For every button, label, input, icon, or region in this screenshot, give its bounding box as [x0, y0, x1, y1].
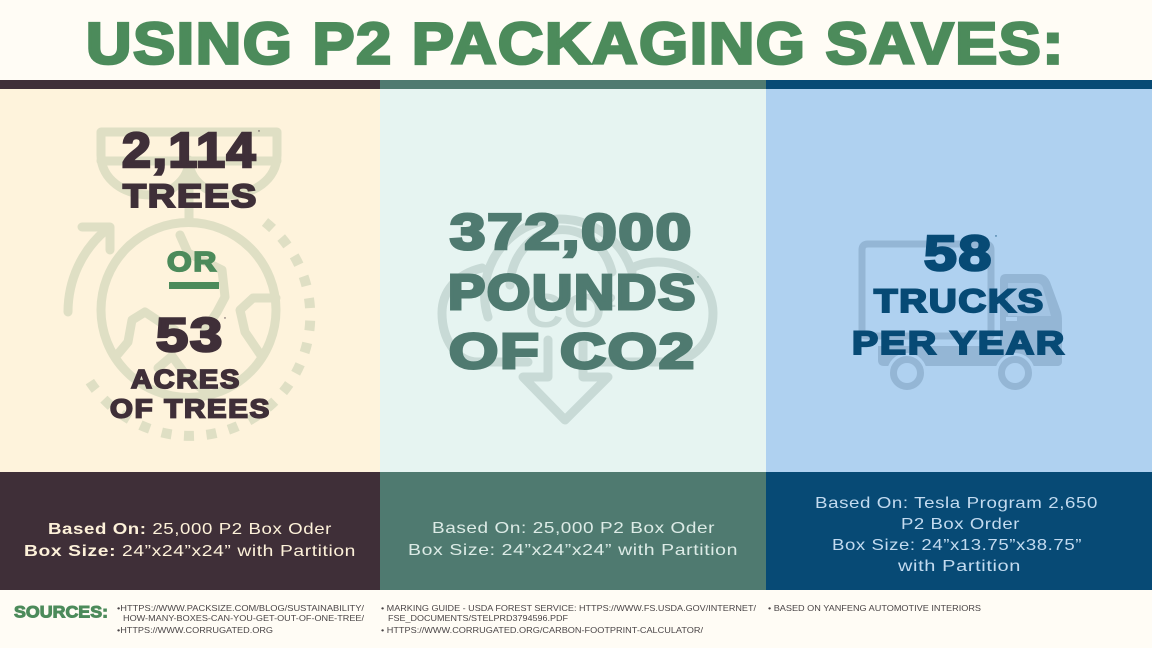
- source list: column 1: [117, 603, 365, 635]
- stat: 53 acres: 53: [156, 308, 224, 361]
- stat: 58 trucks per year: *: [995, 235, 997, 241]
- stat: 372,000 pounds of CO2: 372,000: [450, 204, 693, 260]
- basis: trees: Box Size: 24”x24”x24” with Partition: [24, 543, 356, 560]
- source list: column 3: • BASED ON YANFENG AUTOMOTIVE INTERIORS: [768, 603, 981, 613]
- source list: column 1: •HTTPS://WWW.PACKSIZE.COM/BLOG/SUSTAINABILITY/: [117, 603, 365, 613]
- icon: truck: [862, 244, 1062, 393]
- stat: 58 trucks per year: [852, 227, 1066, 361]
- stat: 58 trucks per year: PER YEAR: [852, 325, 1066, 361]
- basis: trucks: with Partition: [897, 558, 1021, 575]
- icon: globe with sprout: [68, 132, 310, 436]
- stat: 58 trucks per year: 58: [924, 227, 993, 281]
- panel: trees: [0, 80, 380, 590]
- basis: CO2: [380, 472, 766, 590]
- label: or: [167, 246, 219, 289]
- panel: trucks: [766, 80, 1152, 590]
- stat: 53 acres: OF TREES: [110, 396, 271, 424]
- source list: column 2: • MARKING GUIDE - USDA FOREST SERVICE: HTTPS://WWW.FS.USDA.GOV/INTERNET/: [381, 603, 757, 613]
- stat: 372,000 pounds of CO2: POUNDS: [448, 266, 697, 320]
- source list: column 1: HOW-MANY-BOXES-CAN-YOU-GET-OUT-OF-ONE-TREE/: [123, 613, 365, 623]
- source list: column 2: FSE_DOCUMENTS/STELPRD3794596.PDF: [388, 613, 568, 623]
- stat: 53 acres: *: [224, 317, 226, 323]
- basis: trucks: Box Size: 24”x13.75”x38.75”: [832, 537, 1082, 554]
- icon: cloud with CO2 and down arrow: [442, 219, 713, 420]
- stat: 58 trucks per year: TRUCKS: [874, 283, 1045, 319]
- basis: trucks: P2 Box Order: [901, 516, 1020, 533]
- title: USING P2 PACKAGING SAVES:: [86, 12, 1065, 76]
- panel: CO2: [380, 80, 766, 590]
- stat: 2,114 trees: [122, 124, 260, 214]
- heading: sources: SOURCES:: [14, 602, 108, 622]
- source list: column 2: • HTTPS://WWW.CORRUGATED.ORG/CARBON-FOOTPRINT-CALCULATOR/: [381, 625, 704, 635]
- basis: CO2: Box Size: 24”x24”x24” with Partition: [408, 542, 738, 559]
- basis: trucks: [766, 472, 1152, 590]
- basis: CO2: Based On: 25,000 P2 Box Oder: [432, 520, 715, 537]
- source list: column 2: [381, 603, 757, 635]
- basis: trucks: Based On: Tesla Program 2,650: [815, 495, 1098, 512]
- stat: 2,114 trees: *: [258, 130, 260, 136]
- basis: trees: [0, 472, 380, 590]
- stat: 372,000 pounds of CO2: *: [697, 276, 699, 282]
- stat: 2,114 trees: 2,114: [122, 124, 257, 178]
- sources: [14, 602, 981, 635]
- basis: trees: Based On: 25,000 P2 Box Oder: [48, 521, 332, 538]
- icon: cloud with CO2 and down arrow: CO: [525, 285, 605, 338]
- label: or: OR: [167, 246, 218, 277]
- stat: 372,000 pounds of CO2: [448, 204, 699, 379]
- source list: column 1: •HTTPS://WWW.CORRUGATED.ORG: [117, 625, 273, 635]
- icon: cloud with CO2 and down arrow: 2: [606, 291, 616, 311]
- stat: 53 acres: [110, 308, 271, 424]
- stat: 2,114 trees: TREES: [123, 178, 258, 214]
- stat: 372,000 pounds of CO2: OF CO2: [449, 325, 696, 379]
- stat: 53 acres: ACRES: [131, 366, 241, 394]
